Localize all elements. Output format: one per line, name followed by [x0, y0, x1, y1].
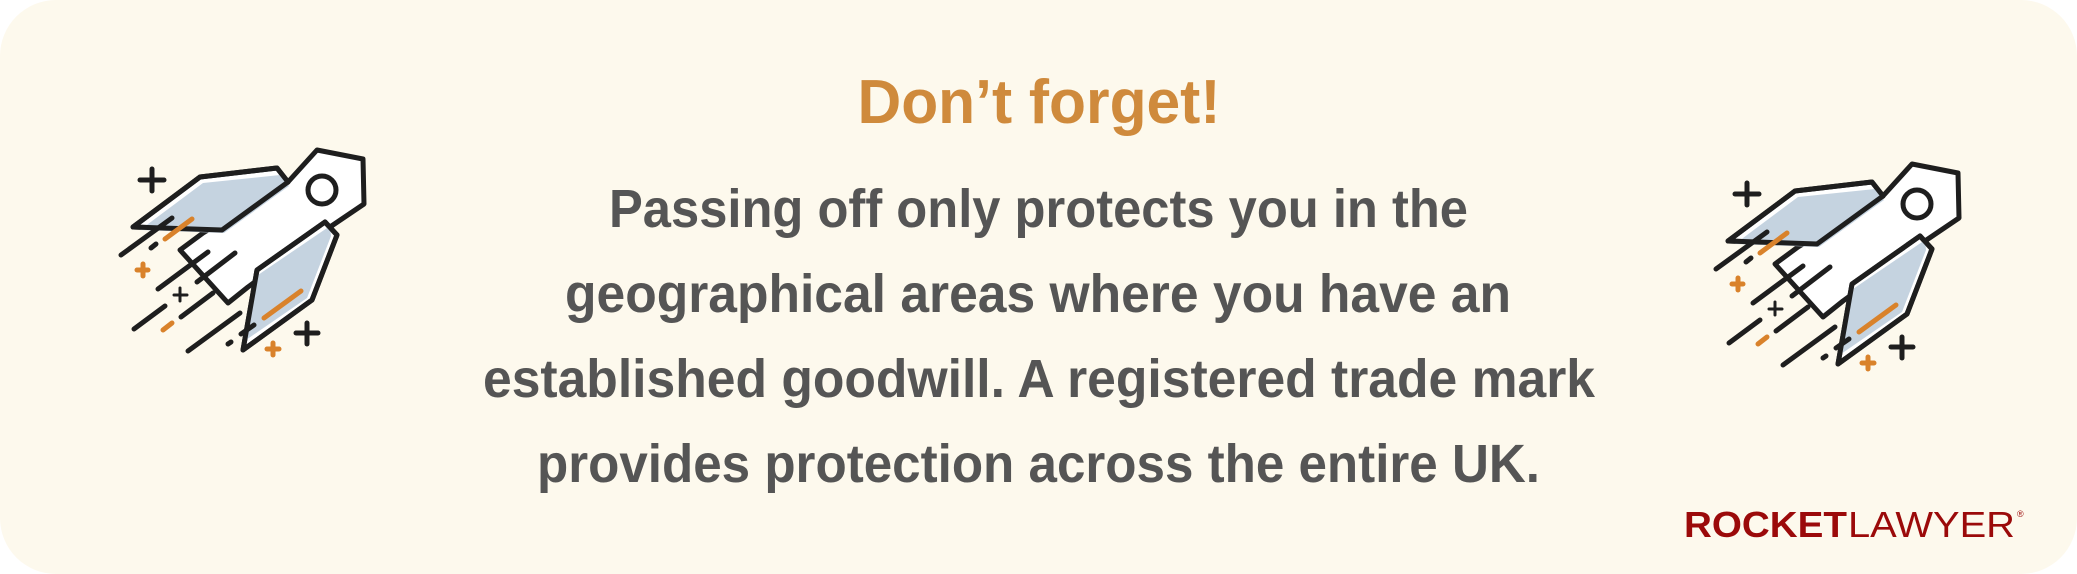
logo: Rocket Lawyer: LAWYER: [1848, 504, 2015, 545]
icon: rocket left: [121, 150, 364, 355]
text block: body: geographical areas where you have an: [565, 264, 1511, 324]
text block: body: [483, 179, 1596, 494]
logo: Rocket Lawyer: ROCKET: [1684, 504, 1847, 545]
icon: rocket right: [1716, 164, 1959, 369]
text block: body: Passing off only protects you in the: [609, 179, 1468, 239]
logo: Rocket Lawyer: [1684, 504, 2024, 545]
title: Don’t forget!: [858, 68, 1220, 137]
text block: body: provides protection across the entire UK.: [537, 434, 1540, 494]
text block: body: established goodwill. A registered trade mark: [483, 349, 1596, 409]
logo: Rocket Lawyer: ®: [2017, 509, 2024, 519]
